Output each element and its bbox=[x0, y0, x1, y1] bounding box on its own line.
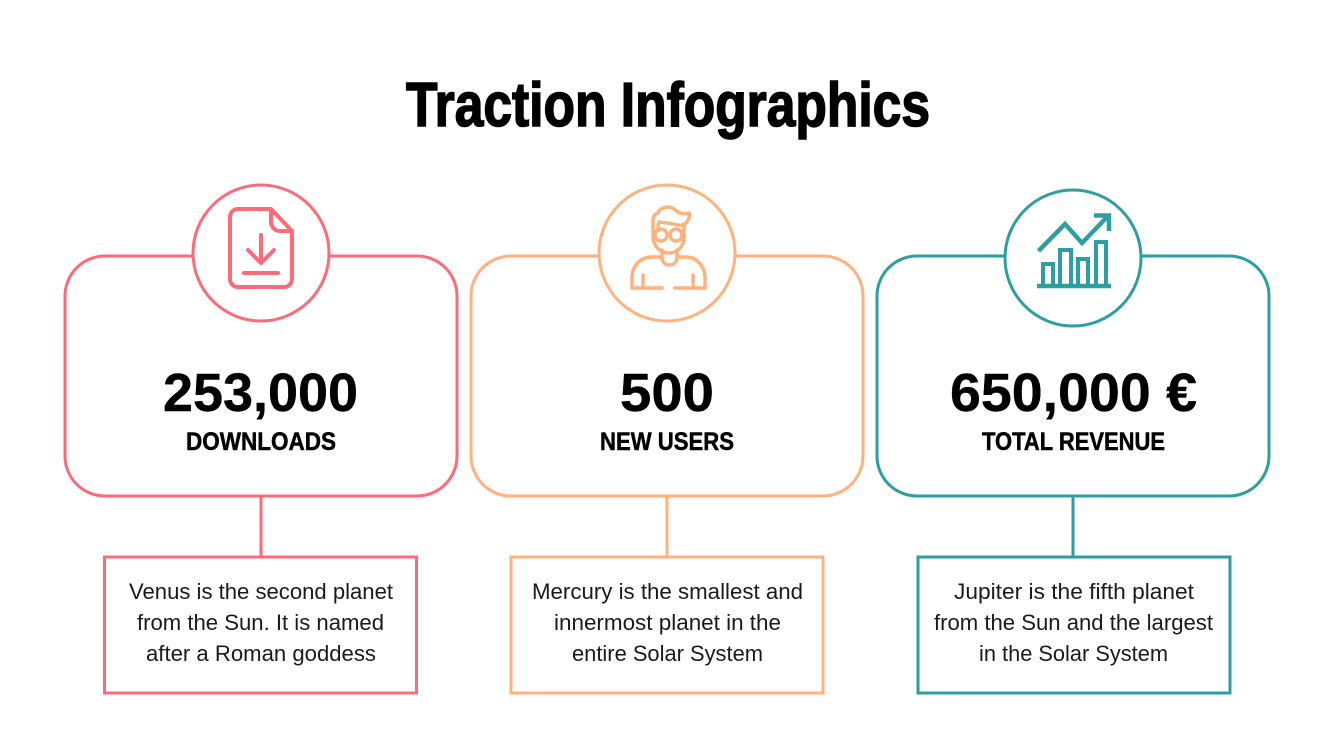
label: new users: NEW USERS bbox=[600, 428, 734, 456]
icon: person with glasses bbox=[632, 207, 705, 288]
panel: new users bbox=[471, 185, 863, 693]
description box: Venus bbox=[104, 557, 416, 693]
description text: Jupiter: Jupiter is the fifth planet bbox=[954, 579, 1194, 604]
stat: 500: 500 bbox=[620, 363, 714, 423]
description box: Jupiter bbox=[918, 557, 1230, 693]
label: total revenue: TOTAL REVENUE bbox=[982, 428, 1165, 456]
icon circle: downloads bbox=[193, 185, 329, 321]
connector: new users bbox=[666, 496, 668, 557]
description text: Mercury: Mercury is the smallest and bbox=[532, 579, 803, 604]
icon: file download bbox=[230, 209, 292, 287]
label: downloads: DOWNLOADS bbox=[186, 428, 336, 456]
panel: total revenue bbox=[877, 190, 1269, 693]
description text: Jupiter: in the Solar System bbox=[979, 641, 1168, 666]
icon circle: total revenue bbox=[1005, 190, 1141, 326]
title: Traction Infographics bbox=[406, 71, 930, 140]
icon circle: new users bbox=[599, 185, 735, 321]
card outline: downloads bbox=[65, 256, 457, 496]
panel: downloads bbox=[65, 185, 457, 693]
description text: Venus bbox=[129, 579, 393, 666]
icon: rising bar chart bbox=[1037, 216, 1111, 286]
description text: Mercury bbox=[532, 579, 803, 666]
stat: 253,000: 253,000 bbox=[163, 363, 358, 423]
description text: Mercury: innermost planet in the bbox=[554, 610, 781, 635]
description text: Jupiter: from the Sun and the largest bbox=[934, 610, 1213, 635]
stat: 650,000 euro: 650,000 € bbox=[950, 363, 1197, 423]
connector: downloads bbox=[260, 496, 262, 557]
description text: Venus: Venus is the second planet bbox=[129, 579, 393, 604]
description box: Mercury bbox=[511, 557, 823, 693]
connector: total revenue bbox=[1072, 496, 1074, 557]
description text: Venus: after a Roman goddess bbox=[146, 641, 376, 666]
card outline: total revenue bbox=[877, 256, 1269, 496]
description text: Mercury: entire Solar System bbox=[572, 641, 763, 666]
description text: Jupiter bbox=[934, 579, 1213, 666]
card outline: new users bbox=[471, 256, 863, 496]
description text: Venus: from the Sun. It is named bbox=[137, 610, 384, 635]
